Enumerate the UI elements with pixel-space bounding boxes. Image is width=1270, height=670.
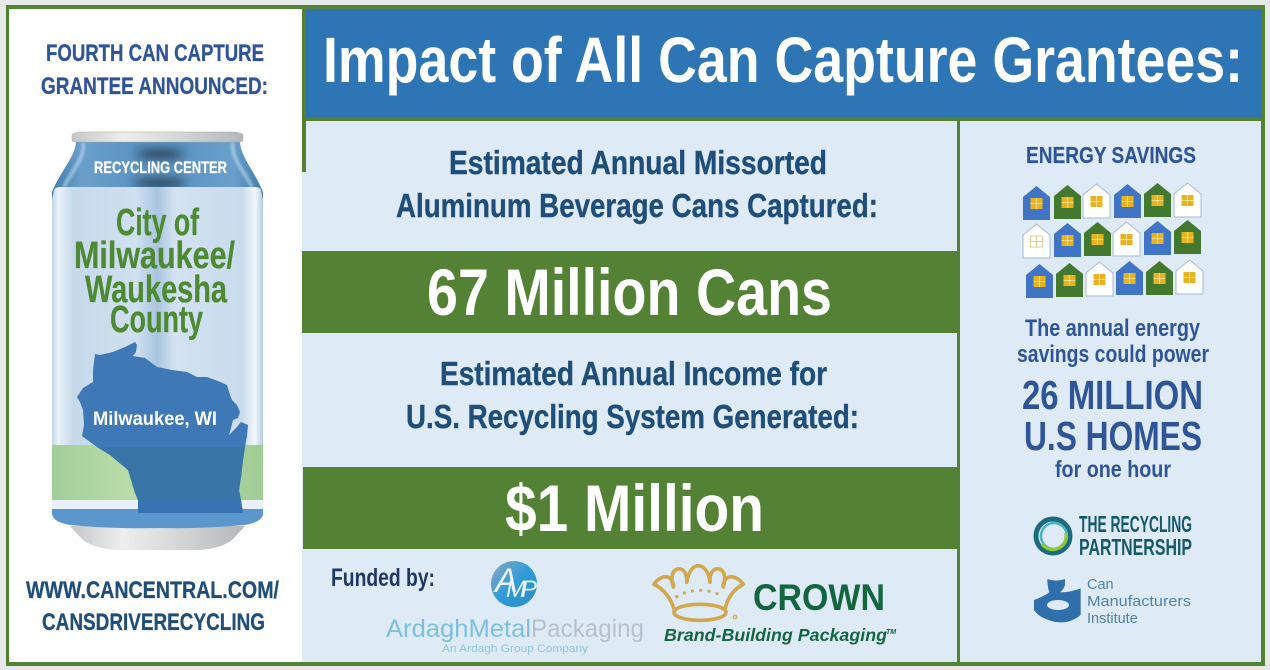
title banner <box>306 9 1261 117</box>
can label: location: Milwaukee, WI <box>93 409 217 430</box>
logo: ardagh metal packaging: An Ardagh Group Company <box>442 643 589 655</box>
logo: ardagh metal packaging <box>386 561 644 655</box>
logo: the recycling partnership: PARTNERSHIP <box>1079 534 1192 560</box>
logo: the recycling partnership: THE RECYCLING <box>1079 511 1192 537</box>
link: can central url <box>26 577 279 636</box>
panel: central statistics <box>302 121 957 662</box>
can label: grantee name: County <box>110 299 203 341</box>
can label: grantee name: Milwaukee/ <box>74 235 235 277</box>
text: energy savings statement <box>1017 315 1209 482</box>
map: Wisconsin silhouette <box>77 342 248 513</box>
heading: fourth grantee announced <box>41 40 268 100</box>
heading: fourth grantee announced: GRANTEE ANNOUNCED: <box>41 73 268 100</box>
logo: can manufacturers institute <box>1034 577 1191 627</box>
text: energy savings statement: for one hour <box>1055 456 1171 482</box>
can label: grantee name: City of <box>116 202 199 244</box>
heading: fourth grantee announced: FOURTH CAN CAPTURE <box>46 40 264 67</box>
text: funded by: Funded by: <box>331 564 435 592</box>
logo: can manufacturers institute: Manufacturers <box>1087 594 1191 610</box>
can label: grantee name <box>74 202 235 341</box>
text: energy savings statement: The annual energy <box>1025 315 1201 342</box>
logo: the recycling partnership <box>1036 511 1192 560</box>
logo: ardagh metal packaging: P <box>521 576 537 603</box>
stat band: 67 million cans <box>302 251 957 333</box>
text: income heading: U.S. Recycling System Generated: <box>406 398 859 435</box>
can label: grantee name: Waukesha <box>85 269 228 311</box>
text: cans captured heading: Aluminum Beverage Cans Captured: <box>396 187 878 224</box>
logo: ardagh metal packaging: ArdaghMetal <box>386 615 531 643</box>
text: income heading <box>406 355 859 435</box>
logo: crown: Brand-Building Packaging <box>664 625 887 645</box>
text: cans captured heading: Estimated Annual Missorted <box>449 144 827 181</box>
stat band: 1 million dollars <box>303 467 957 549</box>
logo: can manufacturers institute: Institute <box>1087 611 1138 627</box>
logo: crown: CROWN <box>753 577 885 618</box>
illustration: aluminum can <box>52 132 263 550</box>
stat band: 67 million cans: 67 Million Cans <box>427 255 832 329</box>
link: can central url: WWW.CANCENTRAL.COM/ <box>26 577 279 604</box>
text: energy savings statement: savings could power <box>1017 341 1209 368</box>
can label: recycling center: RECYCLING CENTER <box>94 158 227 177</box>
icon grid: houses <box>1023 183 1203 298</box>
logo: crown: TM <box>886 629 896 636</box>
stat band: 1 million dollars: $1 Million <box>505 471 764 545</box>
panel: left grantee announcement <box>9 9 302 662</box>
link: can central url: CANSDRIVERECYCLING <box>42 609 265 636</box>
logo: can manufacturers institute: Can <box>1087 577 1114 593</box>
text: cans captured heading <box>396 144 878 224</box>
logo: crown <box>654 566 896 645</box>
text: income heading: Estimated Annual Income for <box>440 355 827 392</box>
panel: energy savings <box>960 121 1261 662</box>
text: energy savings statement: U.S HOMES <box>1024 413 1202 459</box>
logo: ardagh metal packaging: Packaging <box>531 615 644 643</box>
logo: ardagh metal packaging: M <box>506 576 526 603</box>
logo: ardagh metal packaging: A <box>493 562 518 600</box>
heading: energy savings: ENERGY SAVINGS <box>1026 142 1196 168</box>
text: energy savings statement: 26 MILLION <box>1022 372 1203 418</box>
